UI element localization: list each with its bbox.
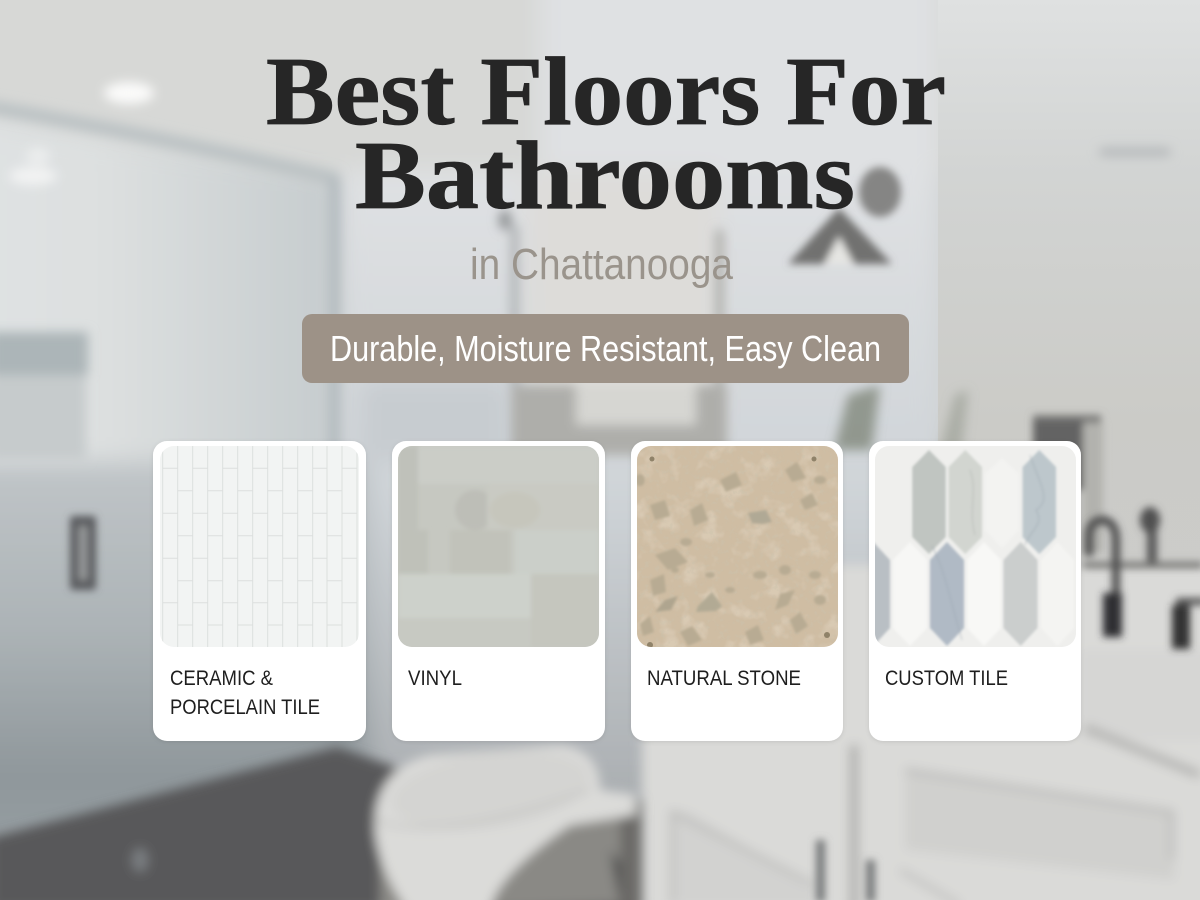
banner: key qualities <box>302 314 909 383</box>
label: NATURAL STONE <box>647 667 801 690</box>
vanity, counter and cabinets <box>642 565 1200 900</box>
label: VINYL <box>408 667 462 690</box>
card: ceramic and porcelain tile <box>153 441 366 741</box>
card: natural stone <box>631 441 843 741</box>
card: custom tile <box>856 441 1081 741</box>
swatch: marble picket mosaic <box>856 446 1076 647</box>
right wall with sharp edge <box>938 0 1200 700</box>
title: Best Floors For <box>266 38 946 146</box>
card: vinyl <box>392 441 605 741</box>
title: Bathrooms <box>355 122 855 230</box>
label: CUSTOM TILE <box>885 667 1008 690</box>
subtitle: in Chattanooga <box>470 240 733 289</box>
swatch: pale grey vinyl planks <box>398 446 599 647</box>
banner: key qualities: Durable, Moisture Resistant, Easy Clean <box>330 328 881 369</box>
swatch: white subway tile <box>160 446 359 647</box>
swatch: beige terrazzo stone <box>635 446 838 648</box>
floor and toilet <box>0 738 642 900</box>
label: PORCELAIN TILE <box>170 696 320 719</box>
title <box>266 38 946 230</box>
label: CERAMIC & <box>170 667 273 690</box>
